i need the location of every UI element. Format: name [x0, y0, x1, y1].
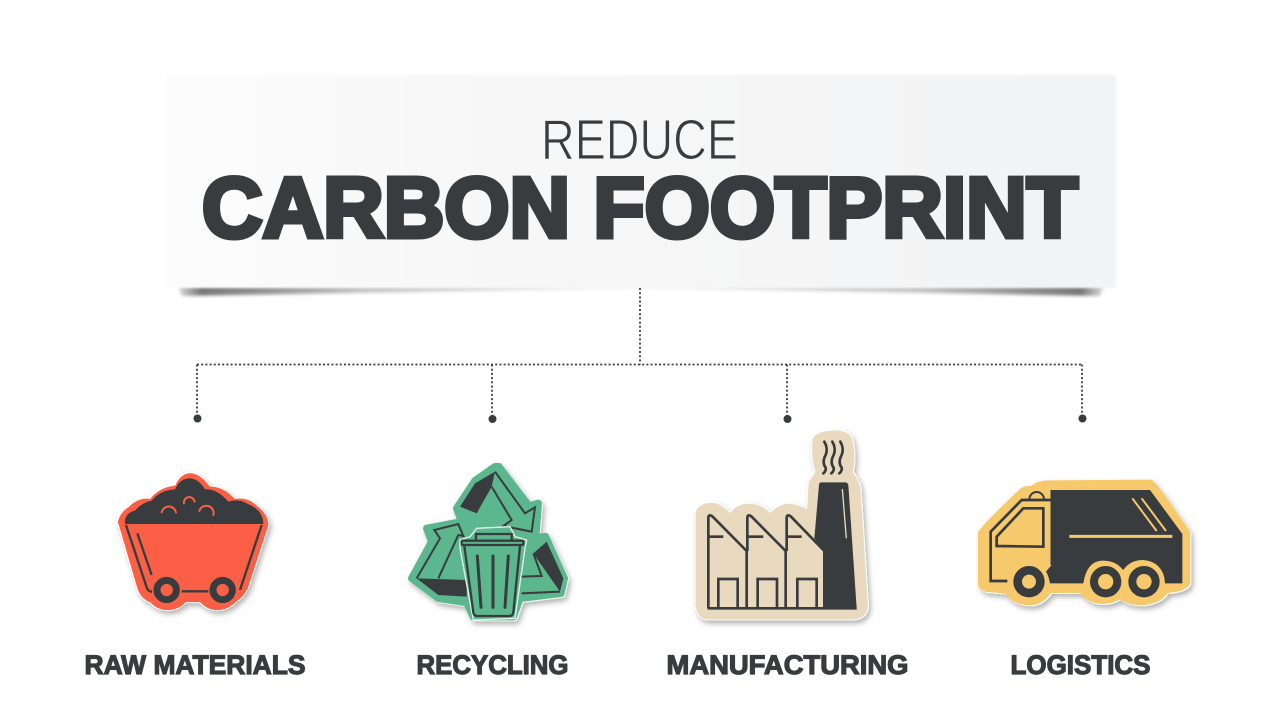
title: carbon footprint: CARBON FOOTPRINT — [202, 161, 1078, 256]
connector tree — [194, 288, 1086, 423]
icon: recycling bin — [412, 467, 565, 620]
panel shadow — [178, 286, 1104, 296]
icon: mine cart — [117, 473, 269, 611]
icon: truck — [980, 482, 1189, 604]
label: recycling: RECYCLING — [416, 650, 568, 680]
title panel — [165, 75, 1116, 296]
title: reduce: REDUCE — [541, 108, 738, 172]
label: logistics: LOGISTICS — [1010, 650, 1150, 680]
label: raw materials: RAW MATERIALS — [84, 650, 306, 680]
panel background — [165, 75, 1116, 288]
icon: factory — [695, 430, 868, 620]
label: manufacturing: MANUFACTURING — [666, 650, 908, 680]
